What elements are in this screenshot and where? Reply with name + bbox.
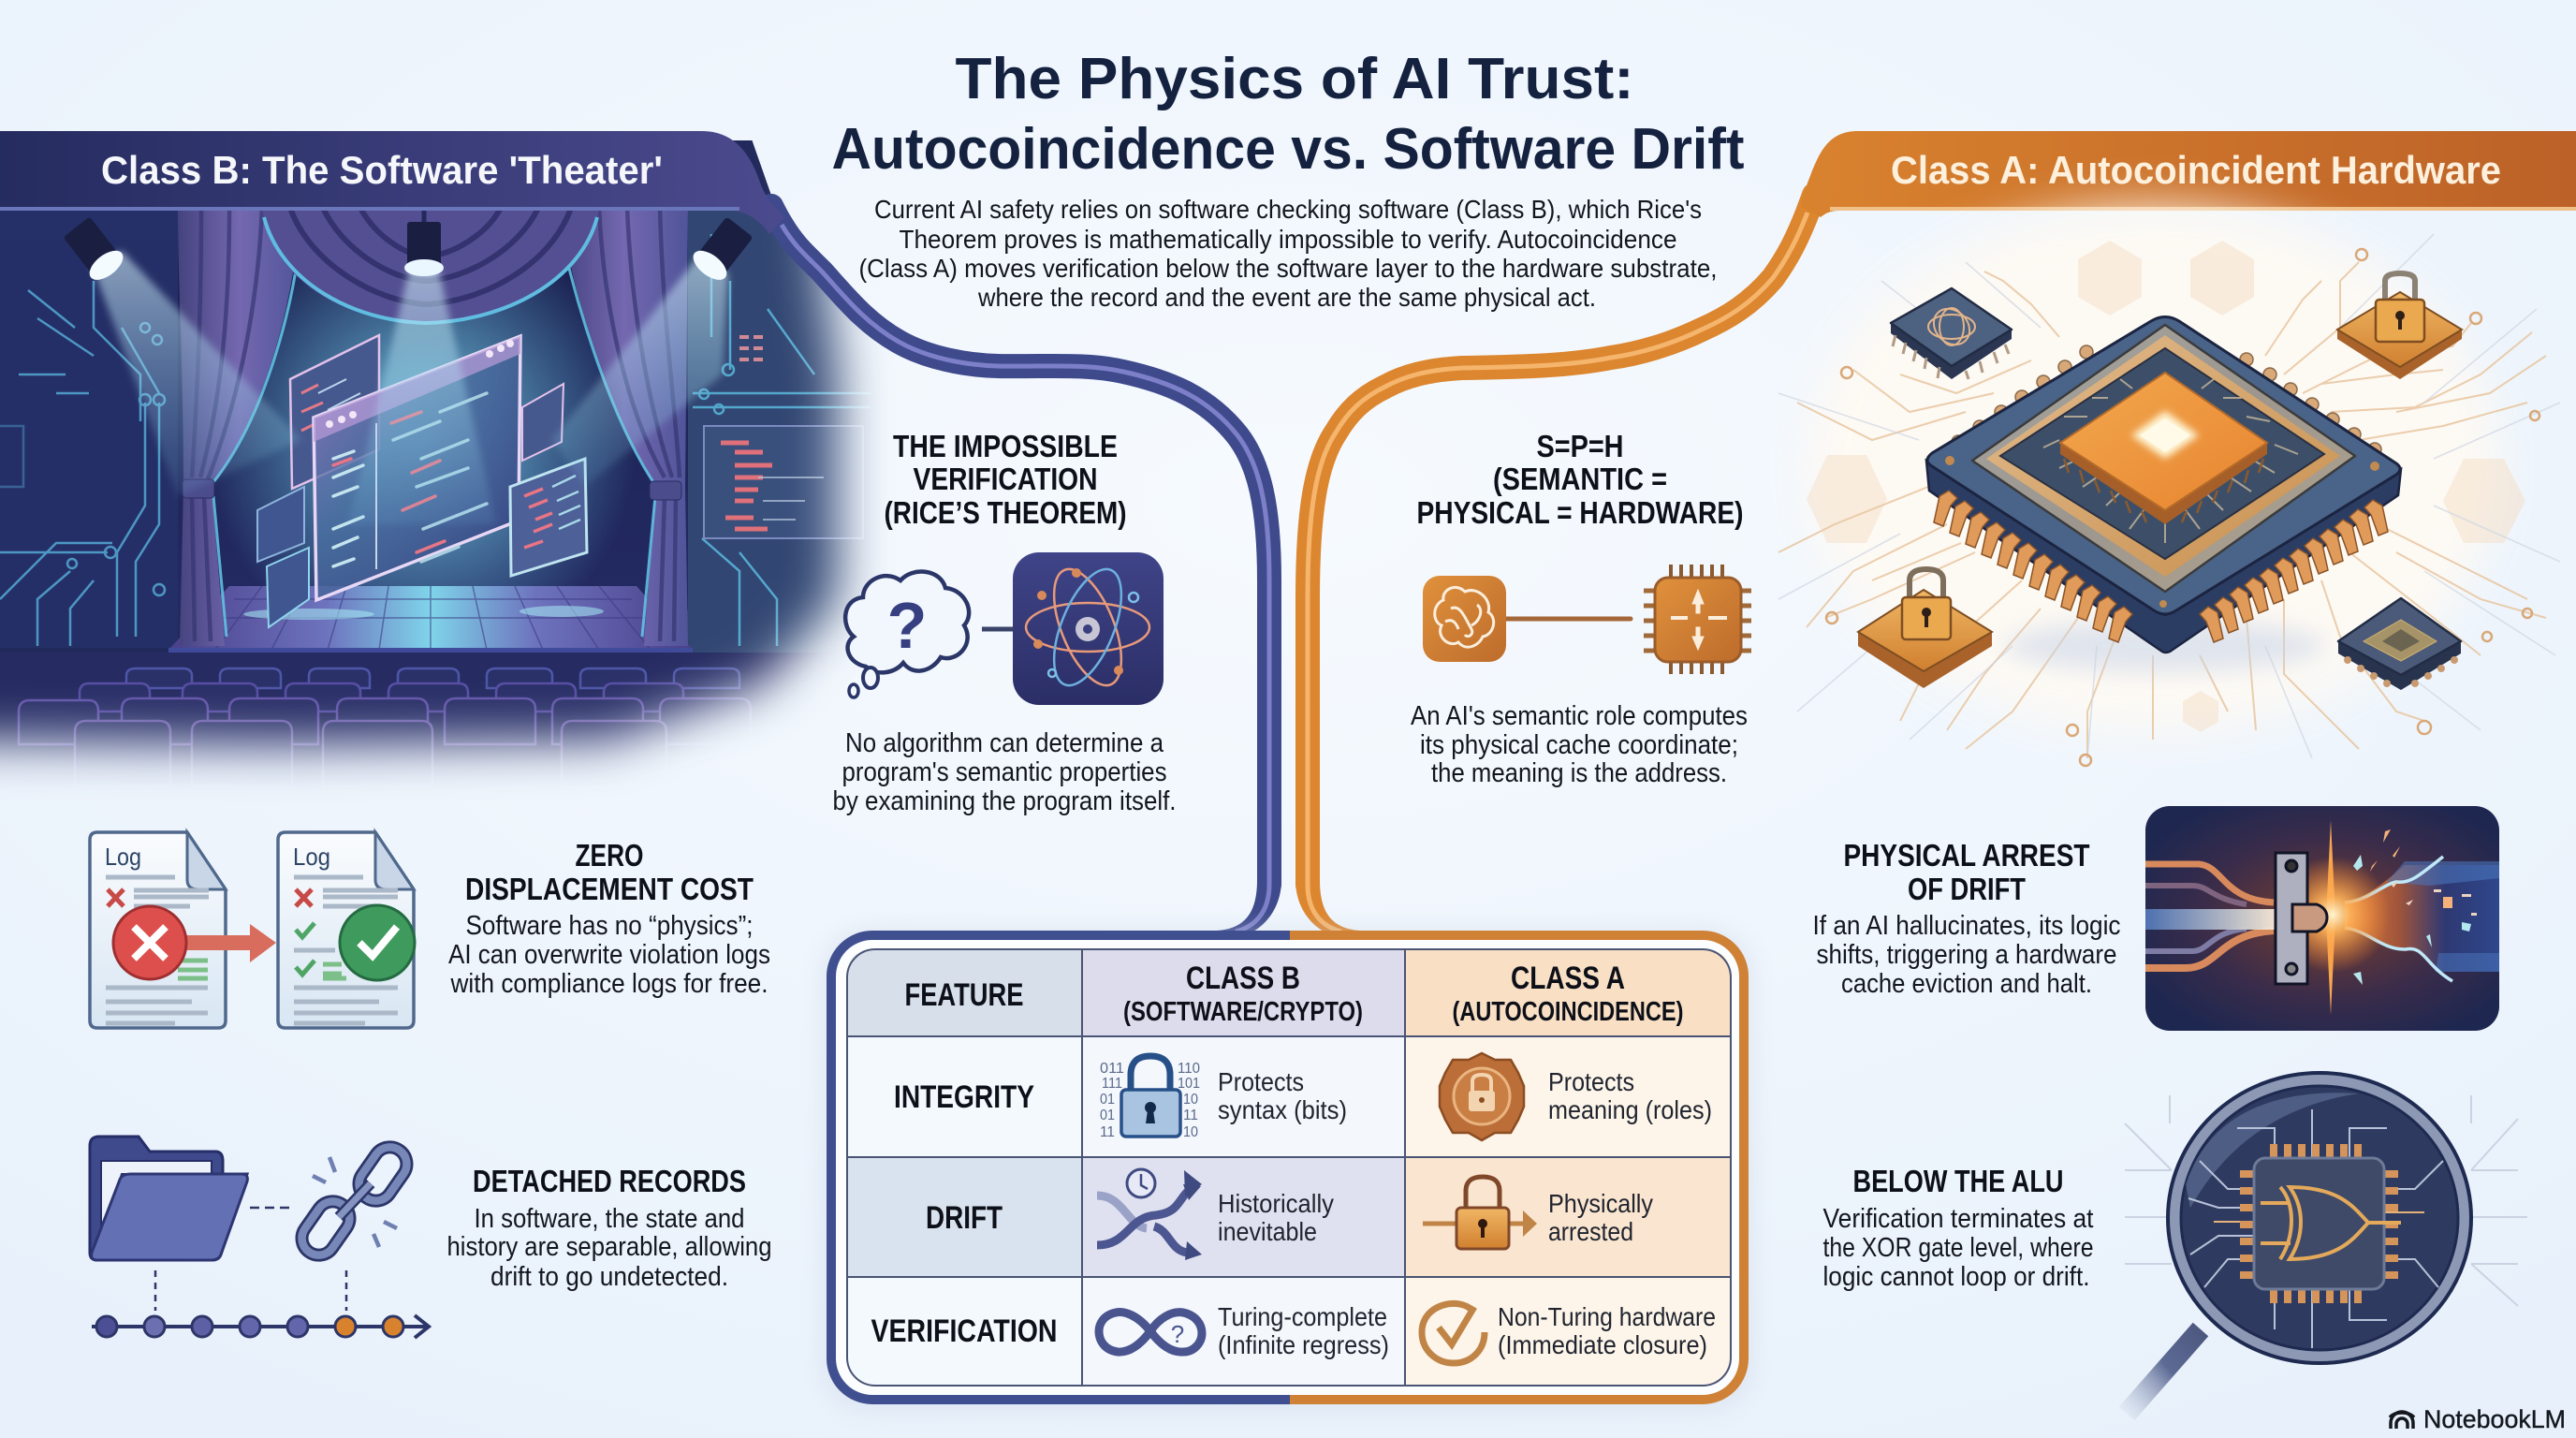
column header: Class B: (SOFTWARE/CRYPTO): [1123, 997, 1363, 1027]
row labels: [871, 977, 1058, 1349]
icon: binary padlock: 11: [1100, 1124, 1115, 1140]
icon: wax seal: [1440, 1053, 1524, 1140]
icon: atom tile: [1013, 552, 1164, 705]
heading: [884, 429, 1127, 530]
text: protects meaning: meaning (roles): [1548, 1095, 1712, 1124]
column header: Class B: CLASS B: [1186, 961, 1300, 996]
row labels: INTEGRITY: [894, 1079, 1034, 1115]
body text: If an AI hallucinates, its logic: [1812, 911, 2121, 941]
icon: magnifier on XOR chip: [2125, 1073, 2527, 1414]
text: turing-complete: [1218, 1302, 1389, 1359]
pins: [1934, 491, 2388, 642]
NotebookLM logo: NotebookLM: [2423, 1405, 2566, 1433]
comparison table: [822, 929, 1753, 1411]
main chip: [1926, 316, 2401, 672]
heading: (SEMANTIC =: [1493, 462, 1667, 496]
text: protects meaning: [1548, 1067, 1712, 1124]
panel: autocoincident chip illustration: [1778, 206, 2560, 766]
icon: binary padlock: 01: [1100, 1092, 1115, 1108]
column header: Class A: (AUTOCOINCIDENCE): [1453, 997, 1683, 1027]
heading: PHYSICAL ARREST: [1844, 838, 2089, 873]
icon: drift arrows with clock: [1097, 1169, 1202, 1260]
top nubs: [1952, 345, 2381, 456]
icon: binary padlock: [1100, 1056, 1200, 1140]
body text: [1812, 911, 2121, 999]
icon: brain tile: [1423, 576, 1506, 662]
section: zero displacement cost: [90, 832, 770, 1028]
body text: its physical cache coordinate;: [1420, 730, 1738, 760]
column header: Class A: CLASS A: [1511, 961, 1625, 996]
icon: infinity loop: [1099, 1313, 1202, 1352]
curtains: [178, 208, 688, 646]
intro paragraph: where the record and the event are the same physical act.: [977, 283, 1596, 312]
body text: [833, 728, 1176, 816]
top valance: [262, 208, 599, 323]
body text: shifts, triggering a hardware: [1816, 940, 2117, 970]
icon: thought cloud: ?: [887, 589, 927, 662]
row labels: DRIFT: [926, 1200, 1003, 1236]
section: below the ALU: [1823, 1073, 2527, 1414]
body text: In software, the state and: [474, 1204, 745, 1234]
icon: folder: [90, 1137, 247, 1260]
connector: orange ribbon from Class A to table: [1295, 195, 1814, 940]
icon: padlock on arrow: [1423, 1177, 1537, 1249]
icon: binary padlock: 10: [1183, 1092, 1198, 1108]
heading: S=P=H: [1537, 429, 1623, 463]
icon: infinity loop: ?: [1171, 1320, 1184, 1348]
hexagon backdrop: [1807, 241, 2525, 732]
body text: cache eviction and halt.: [1841, 969, 2092, 999]
column header: Class A: [1453, 961, 1683, 1027]
panel: software theater illustration: [0, 140, 878, 785]
body text: by examining the program itself.: [833, 786, 1176, 816]
small chip: bottom-right: [2338, 598, 2461, 690]
body text: AI can overwrite violation logs: [448, 940, 770, 970]
icon: check circle: [1422, 1303, 1485, 1363]
icon: log documents: [90, 832, 415, 1028]
heading: DISPLACEMENT COST: [465, 872, 754, 906]
heading: THE IMPOSSIBLE: [893, 429, 1118, 463]
intro paragraph: Current AI safety relies on software checking software (Class B), which Rice's: [874, 195, 1702, 224]
right circuit wall: [687, 211, 871, 653]
header band: Class B: [0, 131, 784, 234]
holographic code windows: [257, 335, 587, 627]
heading: OF DRIFT: [1908, 872, 2026, 906]
section: S=P=H: [1411, 429, 1751, 788]
text: non-turing hardware: [1498, 1302, 1716, 1359]
title: The Physics of AI Trust:: [955, 47, 1634, 111]
text: physically arrested: [1548, 1189, 1653, 1246]
icon: broken chain: [295, 1140, 414, 1262]
table frame: [822, 929, 1753, 1411]
header band: Class A: [1801, 131, 2576, 217]
icon: binary padlock: 101: [1178, 1076, 1200, 1092]
small chip: bottom-left lock: [1858, 569, 1992, 688]
icon: hardware chip: [1644, 565, 1751, 674]
body text: the XOR gate level, where: [1823, 1233, 2093, 1263]
panel: drift halted by latch: [2145, 806, 2499, 1031]
body text: history are separable, allowing: [447, 1232, 771, 1262]
icon: log documents: Log: [293, 843, 330, 871]
icon: binary padlock: 01: [1100, 1108, 1115, 1123]
connector: blue ribbon from Class B to table: [771, 206, 1281, 940]
circuit traces: [1778, 262, 2546, 758]
row labels: VERIFICATION: [871, 1313, 1058, 1349]
table cells: [847, 949, 1731, 1386]
header band: Class A: Class A: Autocoincident Hardware: [1891, 148, 2501, 192]
body text: [448, 911, 770, 999]
text: historically inevitable: Historically: [1218, 1189, 1334, 1218]
heading: PHYSICAL = HARDWARE): [1417, 495, 1743, 530]
heading: [1417, 429, 1743, 530]
body text: [1411, 701, 1748, 788]
heading: BELOW THE ALU: [1853, 1164, 2063, 1198]
text: protects meaning: Protects: [1548, 1067, 1634, 1096]
section: physical arrest of drift: [1812, 806, 2499, 1031]
timeline: [92, 1270, 429, 1338]
stage back: [178, 208, 688, 610]
heading: [465, 838, 754, 906]
title: Autocoincidence vs. Software Drift: [831, 117, 1745, 182]
text: turing-complete: (Infinite regress): [1218, 1330, 1389, 1359]
icon: log documents: Log: [105, 843, 141, 871]
heading: (RICE’S THEOREM): [884, 495, 1127, 530]
heading: ZERO: [575, 838, 644, 873]
stage beams: [92, 251, 728, 524]
icon: binary padlock: 11: [1183, 1108, 1198, 1123]
body text: logic cannot loop or drift.: [1823, 1262, 2089, 1292]
title: [831, 47, 1745, 182]
stage floor: [168, 586, 693, 653]
header band: Class B: Class B: The Software 'Theater': [101, 148, 663, 192]
icon: binary padlock: 10: [1183, 1124, 1198, 1140]
text: turing-complete: Turing-complete: [1218, 1302, 1387, 1331]
left circuit wall: [0, 208, 178, 648]
body text: Verification terminates at: [1823, 1204, 2093, 1234]
intro paragraph: (Class A) moves verification below the software layer to the hardware substrate,: [859, 254, 1717, 283]
heading: [1844, 838, 2089, 906]
body text: No algorithm can determine a: [845, 728, 1164, 758]
text: protects syntax: syntax (bits): [1218, 1095, 1347, 1124]
row labels: FEATURE: [904, 977, 1024, 1013]
text: non-turing hardware: Non-Turing hardware: [1498, 1302, 1716, 1331]
text: non-turing hardware: (Immediate closure): [1498, 1330, 1707, 1359]
heading: VERIFICATION: [914, 462, 1097, 496]
icon: binary padlock: 011: [1100, 1061, 1124, 1077]
audience seats: [17, 653, 805, 773]
section: detached records: [90, 1137, 771, 1338]
text: historically inevitable: [1218, 1189, 1334, 1246]
body text: program's semantic properties: [842, 757, 1166, 787]
body text: drift to go undetected.: [490, 1262, 728, 1292]
icon: thought cloud: [845, 572, 969, 697]
column header: Class B: [1123, 961, 1363, 1027]
heading: DETACHED RECORDS: [473, 1164, 746, 1198]
body text: with compliance logs for free.: [450, 969, 768, 999]
spotlights: [65, 211, 752, 280]
small chip: top-left: [1891, 288, 2012, 379]
body text: the meaning is the address.: [1431, 758, 1727, 788]
intro paragraph: [859, 195, 1717, 312]
text: historically inevitable: inevitable: [1218, 1217, 1317, 1246]
intro paragraph: Theorem proves is mathematically impossible to verify. Autocoincidence: [899, 225, 1677, 254]
icon: binary padlock: 111: [1102, 1076, 1122, 1092]
small chip: top-right lock: [2337, 273, 2462, 379]
text: physically arrested: arrested: [1548, 1217, 1633, 1246]
icon: binary padlock: 110: [1178, 1061, 1200, 1077]
body text: [1823, 1204, 2093, 1292]
text: physically arrested: Physically: [1548, 1189, 1653, 1218]
body text: An AI's semantic role computes: [1411, 701, 1748, 731]
text: protects syntax: Protects: [1218, 1067, 1304, 1096]
body text: [447, 1204, 771, 1292]
body text: Software has no “physics”;: [466, 911, 753, 941]
text: protects syntax: [1218, 1067, 1347, 1124]
section: impossible verification: [833, 429, 1176, 816]
